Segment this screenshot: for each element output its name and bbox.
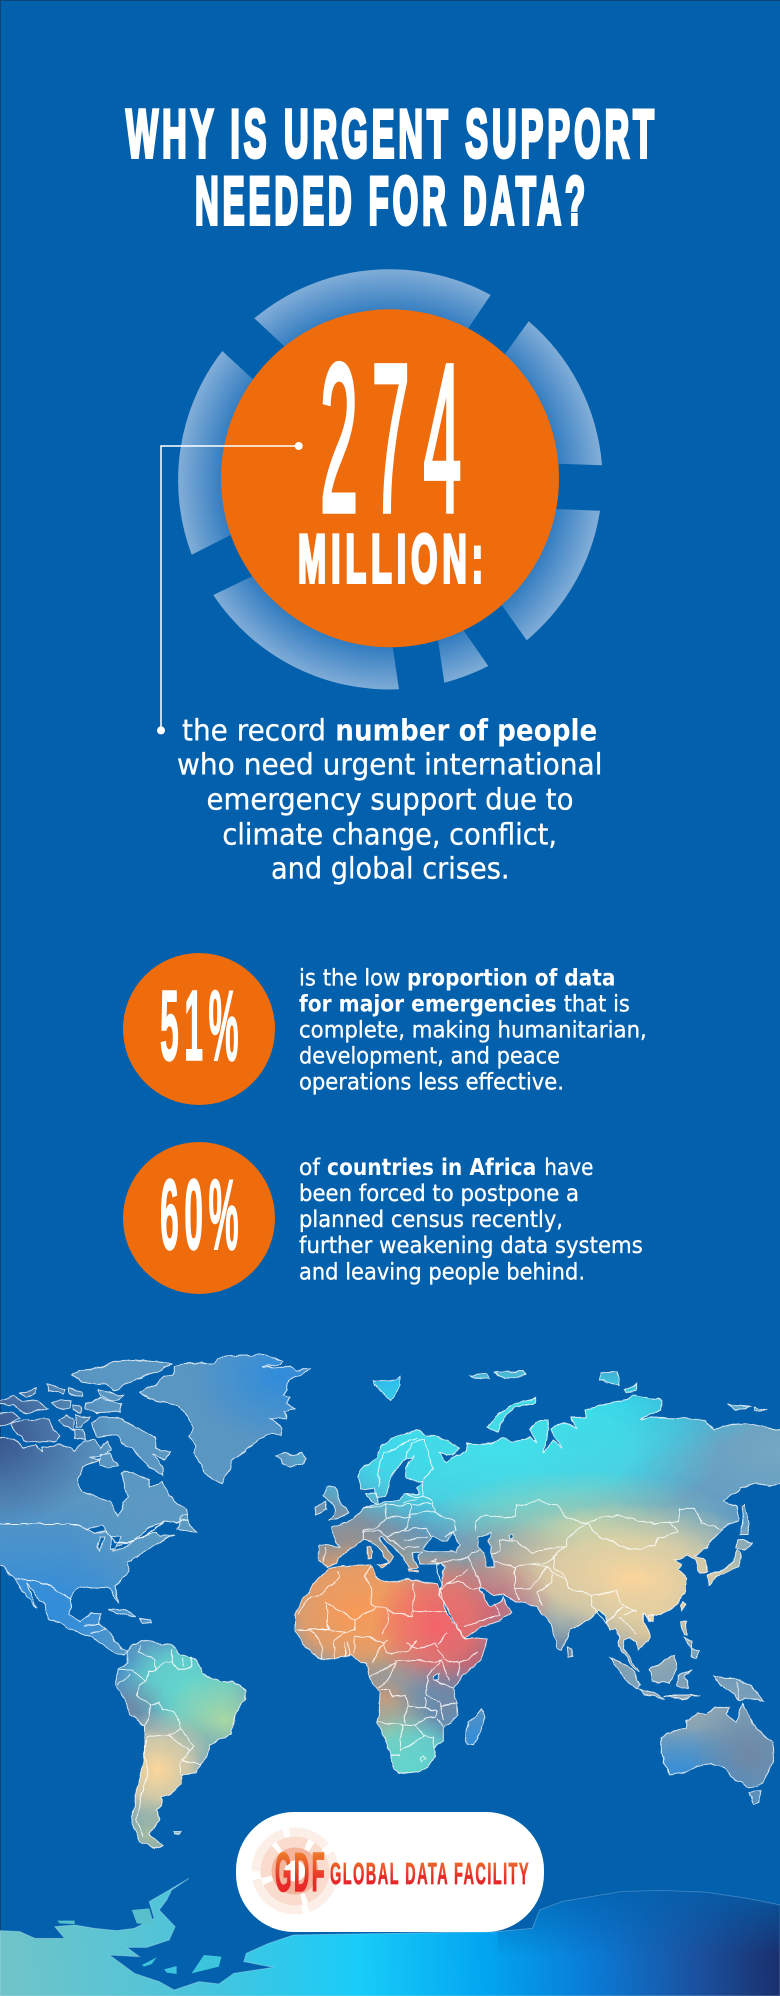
orange circle with 274 million (221, 309, 559, 647)
caption: record number of people: who need urgent international (177, 748, 602, 782)
title (126, 96, 658, 239)
logo pill (236, 1812, 544, 1932)
inland seas and lakes (87, 1526, 513, 1681)
stat text: 60%: of (299, 1155, 321, 1181)
caption: record number of people: climate change, conflict, (222, 817, 557, 851)
country borders: north america (0, 1522, 163, 1633)
coastlines (0, 1355, 780, 1847)
caption: record number of people: emergency support due to (206, 783, 574, 817)
logo emblem (256, 1832, 334, 1910)
stat text: 60%: planned census recently, (299, 1207, 563, 1233)
land gradient fill (0, 1354, 780, 1848)
stat text: 51%: complete, making humanitarian, (299, 1018, 647, 1044)
country border: new guinea (737, 1682, 739, 1699)
caption: record number of people: number of people (335, 714, 597, 748)
caption: record number of people: the record (182, 714, 326, 748)
stat text: 51%: that is (564, 992, 630, 1018)
stat text: 51%: is the low (299, 966, 400, 992)
stat text: 51%: for major emergencies (299, 992, 557, 1018)
connector line from figure to caption (157, 442, 303, 734)
stat text: 51%: proportion of data (407, 966, 615, 992)
segmented ring around figure (178, 269, 602, 690)
infographic canvas: 51% (160, 970, 244, 1082)
antarctica (0, 1878, 780, 1996)
infographic canvas: 60% (160, 1159, 244, 1271)
stat text: 51% (299, 966, 647, 1096)
stat circle: 60% (123, 1142, 275, 1294)
stat text: 60%: further weakening data systems (299, 1233, 643, 1259)
stat circle: 51% (123, 953, 275, 1105)
stat text: 60%: have (544, 1155, 594, 1181)
caption: record number of people: and global crises. (271, 852, 510, 886)
stat text: 60%: and leaving people behind. (299, 1259, 585, 1285)
logo: global data facility: GDF (275, 1841, 327, 1903)
stat text: 51%: development, and peace (299, 1044, 560, 1070)
logo: global data facility (236, 1812, 544, 1932)
stat text: 60%: countries in Africa (327, 1155, 536, 1181)
world map (0, 1354, 780, 1850)
country borders: africa and south america (117, 1620, 478, 1837)
orange circle with 274 million: MILLION: (298, 521, 488, 597)
logo: global data facility: GLOBAL DATA FACILITY (330, 1856, 530, 1891)
country borders: eurasia (298, 1438, 722, 1635)
stat text: 60% (299, 1155, 643, 1285)
stat text: 60%: been forced to postpone a (299, 1181, 579, 1207)
caption: record number of people (177, 714, 602, 886)
stat text: 51%: operations less effective. (299, 1070, 564, 1096)
